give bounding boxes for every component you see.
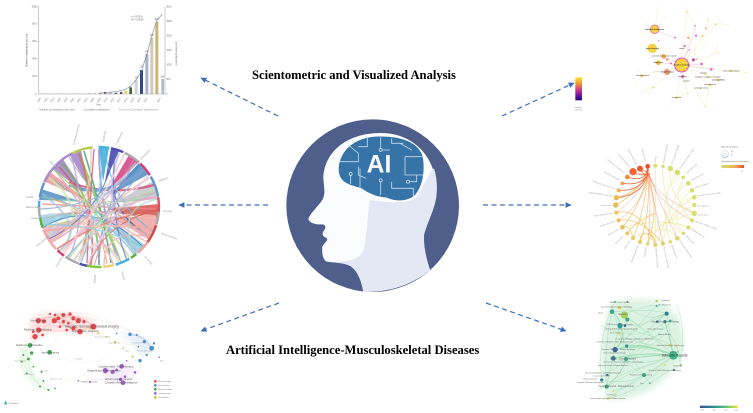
journal labels: Diagnostics bbox=[670, 351, 680, 354]
bar chart: publications per year: 2020 bbox=[137, 97, 142, 103]
VOSviewer mark bbox=[3, 401, 19, 405]
journal labels: Scientific Reports bbox=[662, 353, 688, 357]
bar chart: publications per year: Trend line (Cumulative publications) bbox=[118, 108, 158, 111]
network map: co-occurrence clusters: Osteoporosis bbox=[132, 341, 143, 344]
bar chart: publications per year: 2008 bbox=[97, 97, 102, 103]
journal labels: Journal of Clinical Medicine and Surgery bbox=[648, 370, 681, 372]
node labels: computer vision bbox=[694, 87, 708, 90]
institution labels: University of California bbox=[606, 158, 626, 175]
journal labels: Radiology bbox=[662, 300, 670, 302]
arrow: to middle-right chart bbox=[483, 204, 571, 206]
node labels: knee osteoarthritis bbox=[723, 69, 739, 72]
chord labels: Medicine bbox=[158, 175, 170, 183]
bar chart: publications per year: 2500 bbox=[166, 21, 172, 23]
network map: co-occurrence clusters: Deep learning bbox=[108, 342, 120, 344]
institution labels: Charite Univ bbox=[600, 204, 613, 207]
bar chart: publications per year: 2000 bbox=[32, 6, 38, 8]
bar chart: publications per year: 0 bbox=[166, 94, 168, 96]
journal labels: Neurocomputing bbox=[583, 378, 597, 381]
journal labels: Lancet Digital Health bbox=[593, 374, 610, 377]
institution labels: Johns Hopkins bbox=[670, 245, 677, 258]
citation network: CiteSpace bbox=[575, 106, 582, 109]
institution collaboration circular network bbox=[588, 143, 749, 269]
bar chart: publications per year: 2004 bbox=[84, 97, 89, 103]
VOSviewer mark: VOSviewer bbox=[8, 402, 19, 405]
title: top heading: Scientometric and Visualized Analysis bbox=[252, 68, 456, 82]
chord wedges bbox=[39, 147, 159, 255]
bar chart: publications per year: 1996 bbox=[57, 97, 62, 103]
institution labels: Imperial College London bbox=[694, 220, 718, 231]
central icon: head with AI brain bbox=[286, 119, 459, 292]
network links bbox=[20, 313, 154, 390]
network map: co-occurrence clusters: Rehabilitation bbox=[15, 360, 26, 363]
journal labels: Journal of Bone and Joint Surgery bbox=[657, 344, 684, 347]
institution labels: Peking Univ bbox=[608, 229, 620, 237]
bar chart: publications per year: 1992 bbox=[44, 97, 49, 103]
bar chart: publications per year: 2018 bbox=[131, 97, 136, 103]
node labels: diagnosis bbox=[654, 62, 664, 64]
chord labels: Pathology bbox=[54, 255, 64, 268]
bar chart: publications per year: 173 bbox=[139, 67, 144, 69]
chord labels bbox=[26, 123, 179, 284]
legend: Computer vision bbox=[158, 392, 171, 395]
network labels bbox=[16, 320, 138, 384]
title: bottom heading: Artificial Intelligence-Musculoskeletal Diseases bbox=[226, 343, 479, 357]
collaboration links bbox=[616, 166, 694, 245]
journal co-citation network bbox=[577, 299, 738, 411]
journal labels: Frontiers in Medicine · BMC Musculoskeletal bbox=[597, 340, 633, 343]
bar chart: publications per year: 0 bbox=[35, 94, 37, 96]
institution labels: University of Toronto bbox=[654, 248, 659, 269]
institution labels: Univ Alberta bbox=[697, 204, 710, 207]
chord labels: Oncology bbox=[143, 255, 154, 266]
institution labels: Columbia Univ bbox=[691, 173, 705, 182]
chord labels: Imaging bbox=[31, 216, 41, 220]
bar chart: publications per year: 168 bbox=[160, 76, 165, 78]
arrow: to middle-left chart bbox=[179, 204, 268, 206]
journal labels: Journal of Digital Imaging in Radiology bbox=[601, 306, 632, 309]
node labels: surgery bbox=[700, 72, 707, 75]
bar chart: publications per year: 635 bbox=[150, 35, 154, 37]
node labels: impact bbox=[692, 58, 698, 61]
network labels: Engineering · Biomechanics bbox=[87, 368, 121, 372]
bar chart: publications per year: 3000 bbox=[166, 6, 172, 8]
green cluster bbox=[21, 343, 56, 391]
small nodes bbox=[658, 25, 713, 78]
line: cumulative publications bbox=[100, 14, 162, 93]
node labels: deep learning bbox=[646, 47, 660, 50]
outer ring segments bbox=[14, 122, 184, 292]
institution labels: Yale University bbox=[685, 162, 699, 175]
node labels: osteoarthritis bbox=[712, 79, 726, 82]
institution labels: Central South Univ Hosp bbox=[697, 191, 722, 198]
network labels: Health care · Orthopedics bbox=[16, 344, 43, 347]
journal labels: Medical Physics Journal bbox=[610, 302, 630, 304]
chord labels: Biology bbox=[93, 275, 97, 284]
legend: 10 bbox=[731, 156, 733, 158]
network map: co-occurrence clusters: Bone bbox=[160, 361, 164, 363]
institution labels: Chinese Academy bbox=[617, 153, 631, 169]
purple cluster bbox=[77, 360, 136, 385]
node labels: artificial intelligence bbox=[645, 28, 665, 31]
journal labels: Bone Joint Journal bbox=[648, 328, 663, 331]
journal labels: Journal of Biomechanics and Orthopedic bbox=[605, 327, 638, 330]
bar chart: publications per year: 500 bbox=[166, 79, 171, 81]
network branches bbox=[633, 7, 747, 107]
node labels: model bbox=[679, 48, 685, 50]
red cluster bbox=[32, 312, 96, 339]
institution labels: Shanghai Jiao Tong Univ bbox=[592, 181, 616, 191]
journal labels: Arthritis Rheum bbox=[658, 333, 671, 336]
bar chart: publications per year: 400 bbox=[32, 59, 37, 61]
journal labels bbox=[577, 300, 688, 400]
bar chart: publications per year: Year bbox=[96, 104, 101, 107]
institution labels: Sichuan University bbox=[603, 171, 621, 182]
bar chart: publications per year: 2000 bbox=[166, 35, 172, 37]
bar chart: publications per year: 828 bbox=[155, 19, 159, 21]
chord diagram bbox=[14, 122, 184, 292]
arrow: to bottom-right chart bbox=[486, 303, 566, 331]
bar chart: publications per year: R² = 0.9629 bbox=[131, 18, 144, 21]
institution labels: Tongji Univ bbox=[644, 246, 648, 258]
node labels: classification bbox=[661, 70, 674, 73]
yellow cluster bbox=[89, 327, 134, 358]
journal labels: PLoS One bbox=[610, 332, 618, 334]
legend bbox=[721, 145, 749, 173]
legend: Total intensity of cooperation bbox=[721, 160, 749, 163]
arrow: to top-left chart bbox=[201, 78, 278, 116]
bar chart: publications per year: Number of publications per year bbox=[39, 108, 75, 111]
institution labels: Stanford University bbox=[627, 148, 638, 166]
network labels: Segmentation · Diagnosis bbox=[72, 330, 99, 333]
legend: Medical imaging bbox=[158, 381, 171, 383]
color scale bbox=[575, 77, 582, 100]
institution labels: Sun Yat-sen University bbox=[662, 247, 670, 269]
large nodes bbox=[675, 58, 689, 72]
citation network bbox=[574, 7, 747, 112]
chord labels: Radiology bbox=[101, 129, 107, 142]
institution labels: Mayo Clinic bbox=[615, 235, 625, 245]
journal labels: Gait Posture bbox=[607, 393, 617, 396]
institution labels: Mass Gen bbox=[698, 214, 709, 216]
institution labels: Seoul National Univ bbox=[594, 212, 614, 218]
bar chart: publications per year: 2014 bbox=[117, 97, 122, 103]
journal nodes bbox=[600, 300, 682, 399]
chord labels: Health bbox=[26, 195, 34, 199]
node labels: segmentation bbox=[704, 83, 716, 86]
arrow: to bottom-left chart bbox=[201, 303, 279, 331]
journal labels: Nature Medicine · Therapy bbox=[652, 320, 680, 323]
bar chart: publications per year: 2016 bbox=[124, 97, 129, 103]
network map: co-occurrence clusters bbox=[3, 312, 172, 405]
bar chart: publications per year: 2002 bbox=[77, 97, 82, 103]
bar chart: publications per year: 112 bbox=[134, 78, 139, 80]
bar chart: publications per year: 2006 bbox=[91, 97, 96, 103]
node labels: prediction bbox=[678, 75, 687, 78]
network haze bbox=[19, 312, 155, 390]
bar chart: publications per year: 600 bbox=[32, 41, 37, 43]
network labels: Magnetic resonance · medical imaging bbox=[65, 324, 119, 328]
institution labels: Capital Medical University bbox=[588, 191, 614, 198]
bar chart: publications per year: 1500 bbox=[166, 50, 172, 52]
legend bbox=[154, 380, 172, 399]
journal labels: Clinical Orthopaedics and Related Research bbox=[585, 371, 621, 374]
legend: Deep learning bbox=[158, 385, 169, 387]
journal labels: Journal of Orthopaedic Research · Knee Surgery bbox=[603, 360, 643, 363]
journal co-citation network: 2021 bbox=[713, 409, 716, 411]
bar chart: publications per year: y = 0.6757e bbox=[131, 16, 143, 18]
network map: co-occurrence clusters: Gait analysis bbox=[23, 373, 34, 376]
bar chart: publications per year: 2024 bbox=[157, 97, 162, 103]
bar chart: publications per year: Cumulative publications bbox=[83, 108, 110, 111]
chord ribbons bbox=[40, 148, 158, 266]
journal labels: Applied Sciences · Bioengineering bbox=[598, 385, 635, 388]
network labels: Neural network bbox=[31, 320, 47, 323]
bar chart: publications per year: 1000 bbox=[166, 64, 172, 66]
institution labels bbox=[588, 143, 722, 269]
institution nodes bbox=[613, 164, 697, 247]
journal co-citation network: 2022 bbox=[724, 409, 727, 411]
label: AI: AI bbox=[367, 151, 391, 178]
node labels: system bbox=[683, 80, 690, 83]
journal labels: Spine bbox=[598, 313, 603, 315]
chord labels: Engineering bbox=[114, 131, 124, 145]
legend: 16 bbox=[741, 171, 743, 173]
network map: co-occurrence clusters: Exercise · Pain bbox=[50, 378, 62, 380]
journal labels: IEEE Access · Scientific Reports bbox=[607, 323, 633, 326]
legend: 0 bbox=[721, 171, 722, 173]
journal labels: Computers in Biology and Medicine, IEEE Trans bbox=[615, 337, 654, 340]
chord labels: Neurosciences bbox=[161, 231, 179, 241]
network map: co-occurrence clusters: Fracture detection bbox=[137, 350, 151, 353]
journal labels: Ann Rheum Dis bbox=[658, 304, 671, 307]
journal labels: Osteoarthritis and Cartilage bbox=[603, 352, 626, 355]
legend: 100 bbox=[731, 151, 734, 153]
institution labels: University College London bbox=[678, 147, 696, 170]
journal labels: Pain bbox=[640, 383, 644, 385]
bar chart: publications per year: 200 bbox=[32, 76, 37, 78]
node labels: machine learning bbox=[674, 63, 691, 66]
network map: co-occurrence clusters: Prediction bbox=[75, 357, 83, 360]
network labels: Computer vision · Intelligence bbox=[105, 381, 138, 384]
journal labels: Healthcare bbox=[673, 364, 682, 367]
institution labels: Harvard Univ bbox=[641, 149, 647, 163]
bar chart: publications per year: 800 bbox=[32, 24, 37, 26]
institution labels: Wuhan Univ bbox=[685, 235, 695, 246]
legend: Machine learning bbox=[158, 389, 172, 391]
bar chart: publications per year: 457 bbox=[145, 51, 150, 53]
node labels: recognition bbox=[672, 96, 682, 99]
chord labels: Rheumatology bbox=[35, 233, 51, 248]
chord labels: Robotics bbox=[48, 159, 58, 170]
bar chart: publications per year: 2010 bbox=[104, 97, 109, 103]
journal co-citation network: 2020 bbox=[701, 409, 704, 411]
legend: Amount of papers bbox=[721, 145, 738, 148]
blue cluster bbox=[116, 332, 160, 362]
bar chart: publications per year: 1990 bbox=[37, 97, 42, 103]
arrow: to top-right chart bbox=[502, 83, 574, 116]
journal labels: Frontiers in Bioengineering bbox=[630, 374, 652, 377]
bar chart: publications per year bbox=[25, 6, 178, 111]
institution labels: Duke Univ bbox=[624, 240, 632, 250]
chord labels: Computer Science bbox=[71, 123, 81, 145]
chord labels: Mathematics bbox=[26, 205, 41, 209]
bar chart: publications per year: 2000 bbox=[71, 97, 76, 103]
network labels: Feature extraction bbox=[82, 381, 98, 384]
network labels: Robotic surgery · Sensors bbox=[105, 378, 133, 381]
chord labels: Physics bbox=[120, 271, 127, 281]
network map: co-occurrence clusters: Spine bbox=[125, 351, 130, 353]
institution labels: Shandong University bbox=[662, 143, 669, 164]
network haze bbox=[601, 299, 684, 399]
journal labels: Nature · Science Reports bbox=[610, 358, 637, 361]
bar chart: publications per year: Number of publications per year bbox=[25, 33, 28, 66]
icon: brain bbox=[339, 136, 424, 200]
institution labels: Hospital Special bbox=[690, 228, 705, 239]
institution labels: NYU Langone Health bbox=[670, 144, 681, 165]
node labels: neural network bbox=[636, 74, 649, 77]
legend: Osteoarthritis bbox=[158, 396, 169, 399]
institution labels: Oxford bbox=[654, 155, 658, 163]
bar chart: publications per year: Cumulative publications bbox=[175, 41, 178, 66]
journal labels: Computer Methods and Programs bbox=[577, 381, 604, 384]
institution labels: Zhejiang University bbox=[630, 244, 640, 263]
network links bbox=[597, 301, 683, 398]
bar chart: publications per year: 1998 bbox=[64, 97, 69, 103]
node labels: magnetic resonance imaging bbox=[695, 76, 720, 79]
institution labels: UCSF Medicine bbox=[694, 183, 710, 190]
journal labels: European Radiology · Skeletal Radiology bbox=[602, 348, 635, 351]
institution labels: University of Michigan bbox=[679, 240, 694, 260]
journal co-citation network: 2023 bbox=[735, 409, 738, 411]
color scale bbox=[700, 406, 738, 408]
chord labels: Surgery bbox=[163, 209, 173, 213]
node labels: convolutional neural network bbox=[651, 54, 677, 57]
journal labels: American Journal of Sports Medicine bbox=[598, 364, 628, 367]
institution labels: Fudan University bbox=[599, 219, 617, 228]
network map: co-occurrence clusters: Knee osteoarthritis bbox=[95, 336, 110, 339]
bar chart: publications per year: 2022 bbox=[144, 97, 149, 103]
network labels: Computer vision · Pose estimation bbox=[98, 365, 134, 368]
network labels: Machine learning bbox=[41, 351, 60, 354]
network map: co-occurrence clusters: Wearables bbox=[40, 371, 49, 373]
journal labels: Journal of Arthroplasty and Medical Internet bbox=[590, 397, 626, 400]
bar chart: publications per year: 1994 bbox=[51, 97, 56, 103]
node labels bbox=[636, 28, 739, 99]
chord labels: Orthopedics bbox=[139, 147, 152, 161]
legend: 50 bbox=[731, 153, 733, 155]
citation network: 2000 2024 bbox=[574, 110, 582, 112]
journal labels: Sensors bbox=[618, 313, 628, 316]
network labels: Radiology · Classification bbox=[24, 329, 53, 332]
bar chart: publications per year: 2012 bbox=[111, 97, 116, 103]
